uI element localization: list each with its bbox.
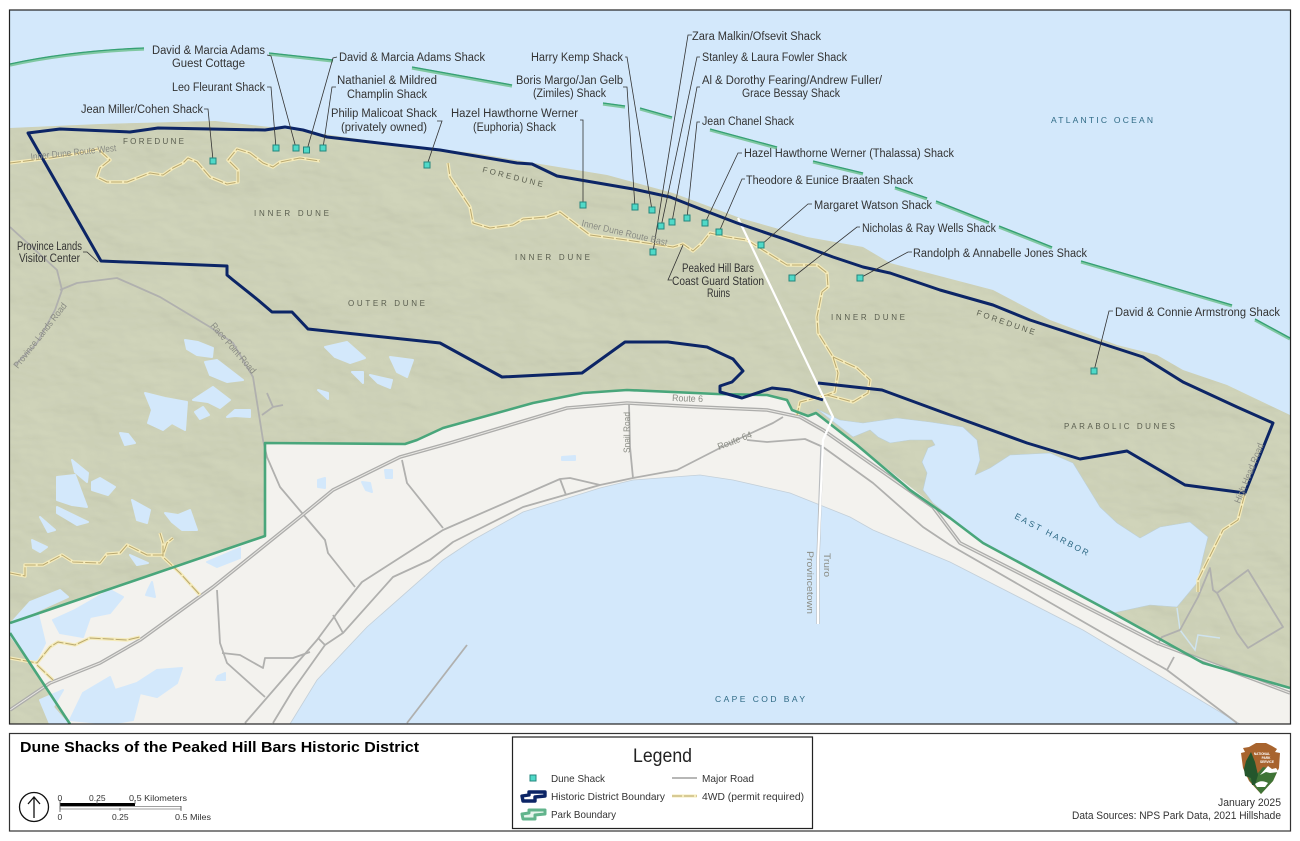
terrain labels xyxy=(123,137,1175,431)
shack name labels: (Zimiles) Shack xyxy=(533,88,606,100)
shack name labels: Theodore & Eunice Braaten Shack xyxy=(746,175,913,187)
terrain labels: INNER DUNE xyxy=(831,313,905,322)
shack name labels: Hazel Hawthorne Werner (Thalassa) Shack xyxy=(744,148,954,160)
legend: park boundary xyxy=(522,809,617,821)
road labels: Province Lands Road xyxy=(12,301,70,371)
shack name labels: Nicholas & Ray Wells Shack xyxy=(862,223,996,235)
ocean xyxy=(10,10,1290,502)
shack name labels: (Euphoria) Shack xyxy=(473,122,556,134)
legend: park boundary: Park Boundary xyxy=(551,809,617,821)
dune land xyxy=(10,100,1290,724)
shack name labels: Guest Cottage xyxy=(172,58,245,70)
title panel xyxy=(10,734,1290,831)
park boundary: land xyxy=(10,390,1290,724)
terrain labels: OUTER DUNE xyxy=(348,299,425,308)
date and sources: Data Sources: NPS Park Data, 2021 Hillshade xyxy=(1072,810,1281,822)
legend: Legend xyxy=(633,745,692,767)
Cape Cod Bay xyxy=(290,475,1240,724)
historic district boundary xyxy=(28,127,1273,493)
shack name labels: Ruins xyxy=(707,288,730,300)
road labels: Provincetown xyxy=(804,551,815,614)
terrain labels: INNER DUNE xyxy=(515,253,590,262)
East Harbor water xyxy=(817,409,1208,613)
scale bar: 0 xyxy=(58,812,62,822)
ponds xyxy=(10,340,575,724)
heading: Dune Shacks of the Peaked Hill Bars Historic District xyxy=(20,739,419,756)
shack name labels: Province Lands xyxy=(17,241,82,253)
scale bar xyxy=(58,793,211,822)
terrain labels: PARABOLIC DUNES xyxy=(1064,422,1175,431)
scale bar: 0.25 xyxy=(112,812,129,822)
shack name labels: Visitor Center xyxy=(19,253,80,265)
shack name labels: Philip Malicoat Shack xyxy=(331,108,437,120)
town boundary line xyxy=(738,218,833,624)
legend xyxy=(512,737,812,828)
date and sources xyxy=(1072,797,1281,822)
date and sources: January 2025 xyxy=(1218,797,1281,809)
water labels: EAST HARBOR xyxy=(1013,511,1090,558)
legend: 4WD: 4WD (permit required) xyxy=(702,791,804,803)
shack name labels: Boris Margo/Jan Gelb xyxy=(516,75,623,87)
shack name labels: Jean Miller/Cohen Shack xyxy=(81,104,203,116)
road labels: Inner Dune Route West xyxy=(30,143,117,163)
shack name labels: David & Marcia Adams xyxy=(152,45,265,57)
shack name labels: Al & Dorothy Fearing/Andrew Fuller/ xyxy=(702,75,883,87)
shack name labels: Coast Guard Station xyxy=(672,276,764,288)
terrain labels: FOREDUNE xyxy=(975,308,1036,337)
stream xyxy=(1177,608,1220,650)
shack name labels: Zara Malkin/Ofsevit Shack xyxy=(692,31,821,43)
shack name labels: Randolph & Annabelle Jones Shack xyxy=(913,248,1087,260)
road labels xyxy=(12,143,1267,614)
terrain labels: INNER DUNE xyxy=(254,209,329,218)
road labels: Race Point Road xyxy=(208,321,258,376)
road labels: Inner Dune Route East xyxy=(580,218,669,249)
shack name labels xyxy=(17,31,1280,319)
icon: NPS arrowhead: PARK xyxy=(1262,756,1271,760)
water labels xyxy=(715,115,1153,704)
water labels: CAPE COD BAY xyxy=(715,694,805,704)
water labels: ATLANTIC OCEAN xyxy=(1051,115,1153,125)
legend: major road xyxy=(672,773,754,785)
shack name labels: Jean Chanel Shack xyxy=(702,116,794,128)
shack name labels: Leo Fleurant Shack xyxy=(172,82,265,94)
minor and major roads xyxy=(10,227,1290,723)
shack name labels: David & Marcia Adams Shack xyxy=(339,52,485,64)
developed land xyxy=(10,390,1290,724)
4WD trails xyxy=(10,149,1245,680)
shack name labels: Hazel Hawthorne Werner xyxy=(451,108,578,120)
shack name labels: Grace Bessay Shack xyxy=(742,88,840,100)
park boundary: ocean segments xyxy=(10,48,1290,339)
shack name labels: Harry Kemp Shack xyxy=(531,52,623,64)
icon: NPS arrowhead xyxy=(1241,743,1280,794)
legend: dune shack xyxy=(530,773,606,785)
legend: historic district boundary: Historic District Boundary xyxy=(551,791,666,803)
scale bar: 0.25 xyxy=(89,793,106,803)
road labels: Truro xyxy=(821,553,832,577)
shack name labels: Nathaniel & Mildred xyxy=(337,75,437,87)
icon: NPS arrowhead: NATIONAL xyxy=(1254,752,1270,756)
north arrow xyxy=(20,792,48,822)
shack name labels: David & Connie Armstrong Shack xyxy=(1115,307,1280,319)
terrain labels: FOREDUNE xyxy=(123,137,184,146)
shack name labels: Peaked Hill Bars xyxy=(682,263,754,275)
road labels: High Head Road xyxy=(1233,442,1267,505)
shack name labels: Margaret Watson Shack xyxy=(814,200,932,212)
shack name labels: (privately owned) xyxy=(341,122,427,134)
shack name labels: Champlin Shack xyxy=(347,89,427,101)
Route 6 xyxy=(10,403,1290,710)
dune shack markers xyxy=(210,145,1097,374)
road labels: Route 64 xyxy=(716,430,754,453)
scale bar: 0 xyxy=(58,793,62,803)
terrain labels: FOREDUNE xyxy=(482,165,544,189)
legend: dune shack: Dune Shack xyxy=(551,773,606,785)
road labels: Snail Road xyxy=(622,412,633,453)
road labels: Route 6 xyxy=(672,393,703,405)
callout leaders xyxy=(83,35,1113,371)
scale bar: 0.5 Kilometers xyxy=(129,793,187,803)
icon: NPS arrowhead: SERVICE xyxy=(1260,760,1274,764)
legend: major road: Major Road xyxy=(702,773,754,785)
shack name labels: Stanley & Laura Fowler Shack xyxy=(702,52,847,64)
scale bar: 0.5 Miles xyxy=(175,812,211,822)
